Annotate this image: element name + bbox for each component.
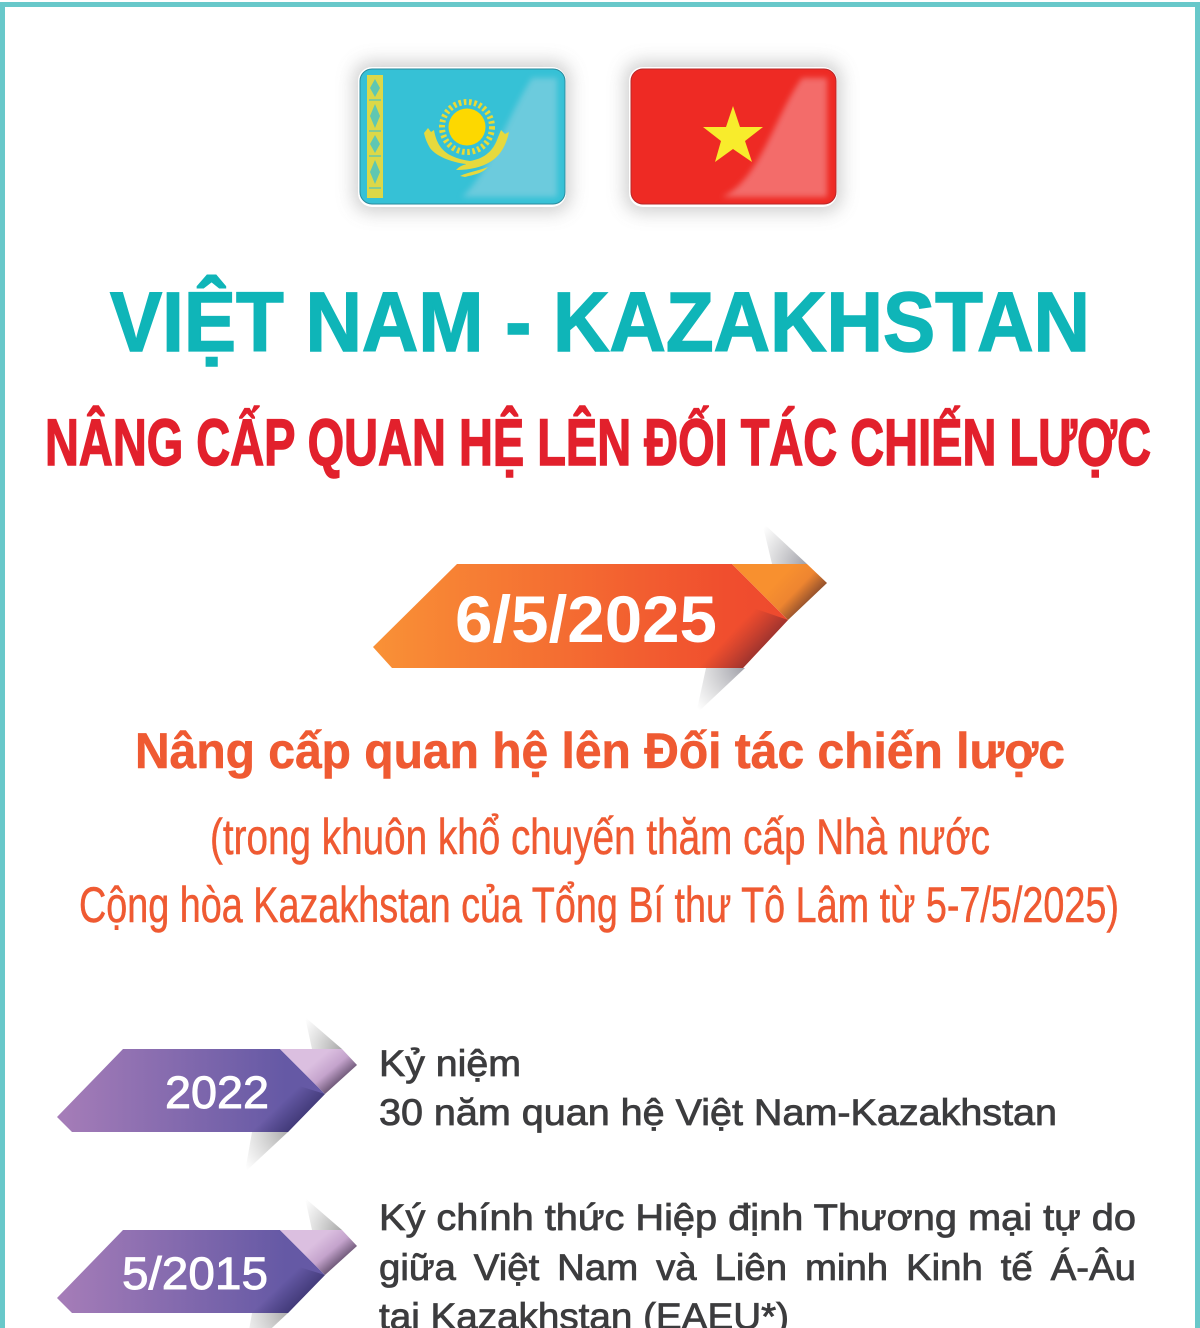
timeline arrow: 5/2015 — [57, 1198, 357, 1328]
text block: context of the visit — [79, 809, 1119, 933]
timeline text: 2022: Kỷ niệm — [379, 1043, 521, 1084]
icon: Vietnam flag — [625, 62, 841, 212]
timeline text: 5/2015 — [379, 1197, 1136, 1328]
title: Việt Nam - Kazakhstan: VIỆT NAM - KAZAKHSTAN — [110, 275, 1090, 369]
date arrow: 6/5/2025: 6/5/2025 — [455, 582, 717, 656]
sun — [448, 108, 486, 146]
timeline text: 5/2015: giữa Việt Nam và Liên minh Kinh tế Á-Âu — [379, 1247, 1136, 1288]
icon: Kazakhstan flag — [354, 62, 570, 212]
timeline arrow: 2022 — [57, 1017, 357, 1172]
timeline arrow: 2022: 2022 — [165, 1067, 269, 1118]
timeline text: 2022: 30 năm quan hệ Việt Nam-Kazakhstan — [379, 1092, 1057, 1133]
text block: context of the visit: (trong khuôn khổ chuyến thăm cấp Nhà nước — [210, 809, 990, 865]
heading: upgrade relations: Nâng cấp quan hệ lên Đối tác chiến lược — [135, 723, 1065, 779]
date arrow: 6/5/2025 — [373, 522, 827, 714]
eagle — [424, 128, 509, 170]
timeline text: 5/2015: Ký chính thức Hiệp định Thương mại tự do — [379, 1197, 1136, 1238]
ornament band — [367, 75, 383, 198]
timeline arrow: 5/2015: 5/2015 — [122, 1248, 268, 1299]
timeline text: 2022 — [379, 1043, 1057, 1133]
